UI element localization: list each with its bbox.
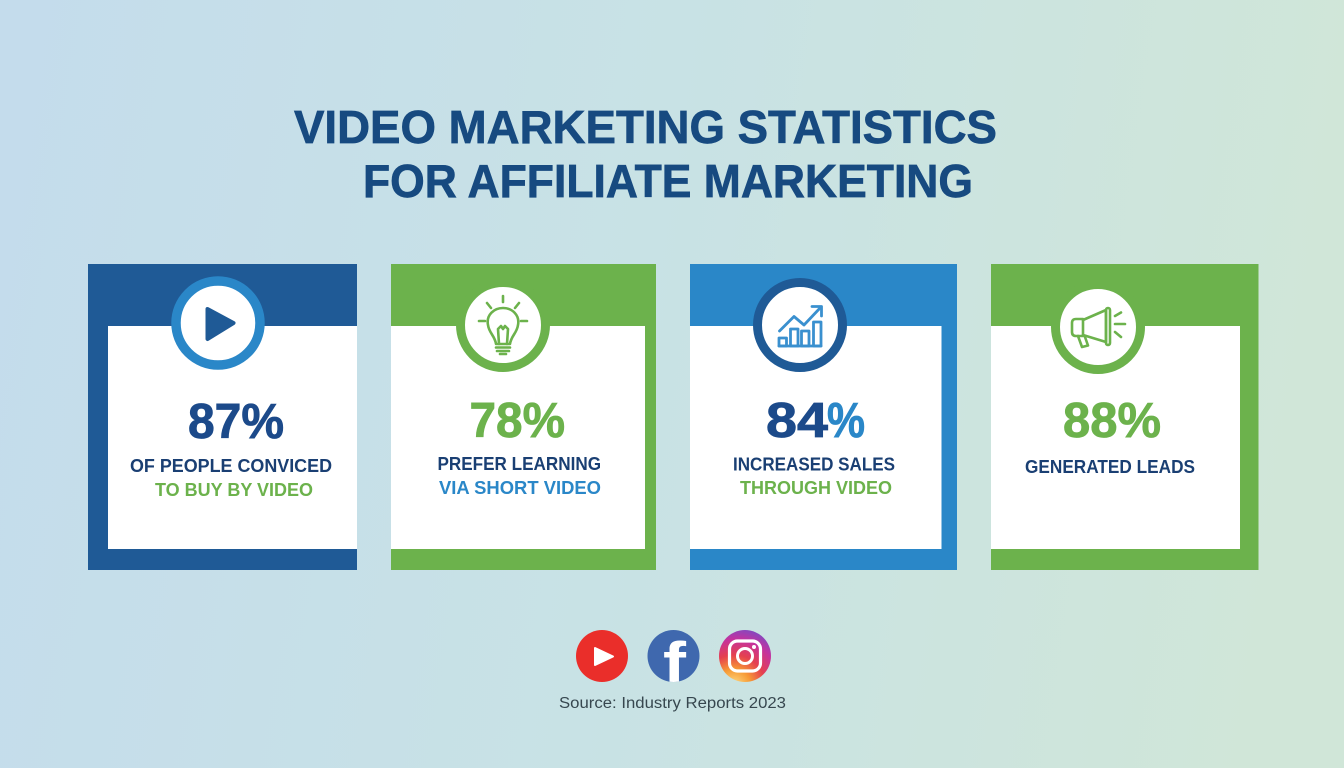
icon: youtube <box>576 630 628 682</box>
panel: 87% convinced by video <box>88 264 357 570</box>
icon: light bulb <box>460 282 546 368</box>
title <box>294 101 997 207</box>
label: prefer learning <box>438 454 601 498</box>
stat: 84% <box>766 394 865 448</box>
stat: 84%: 84 <box>766 394 828 448</box>
icon: megaphone <box>1056 284 1140 370</box>
icon: instagram <box>719 630 771 682</box>
icon: facebook <box>648 630 700 682</box>
title: FOR AFFILIATE MARKETING <box>363 155 973 207</box>
panel: 88% generated leads <box>991 264 1258 570</box>
label: increased sales: INCREASED SALES <box>733 454 895 474</box>
label: increased sales <box>733 454 895 498</box>
stat: 84%: % <box>827 394 865 448</box>
label: generated leads: GENERATED LEADS <box>1025 457 1195 477</box>
icon: facebook: f <box>663 631 687 696</box>
stat: 78%: 78% <box>470 394 565 448</box>
label: of people convinced: TO BUY BY VIDEO <box>155 480 313 500</box>
icon: growth chart <box>758 282 842 368</box>
label: of people convinced <box>130 456 332 500</box>
label: prefer learning: PREFER LEARNING <box>438 454 601 474</box>
icon: play button <box>176 281 260 365</box>
label: prefer learning: VIA SHORT VIDEO <box>439 478 601 498</box>
panel: 84% increased sales <box>690 264 957 570</box>
panel: 78% prefer learning <box>391 264 656 570</box>
stat: 88%: 88% <box>1063 394 1161 448</box>
stat: 87%: 87% <box>188 395 284 449</box>
title: VIDEO MARKETING STATISTICS <box>294 101 997 153</box>
label: increased sales: THROUGH VIDEO <box>740 478 892 498</box>
label: of people convinced: OF PEOPLE CONVICED <box>130 456 332 476</box>
source note: Source: Industry Reports 2023 <box>559 695 786 712</box>
